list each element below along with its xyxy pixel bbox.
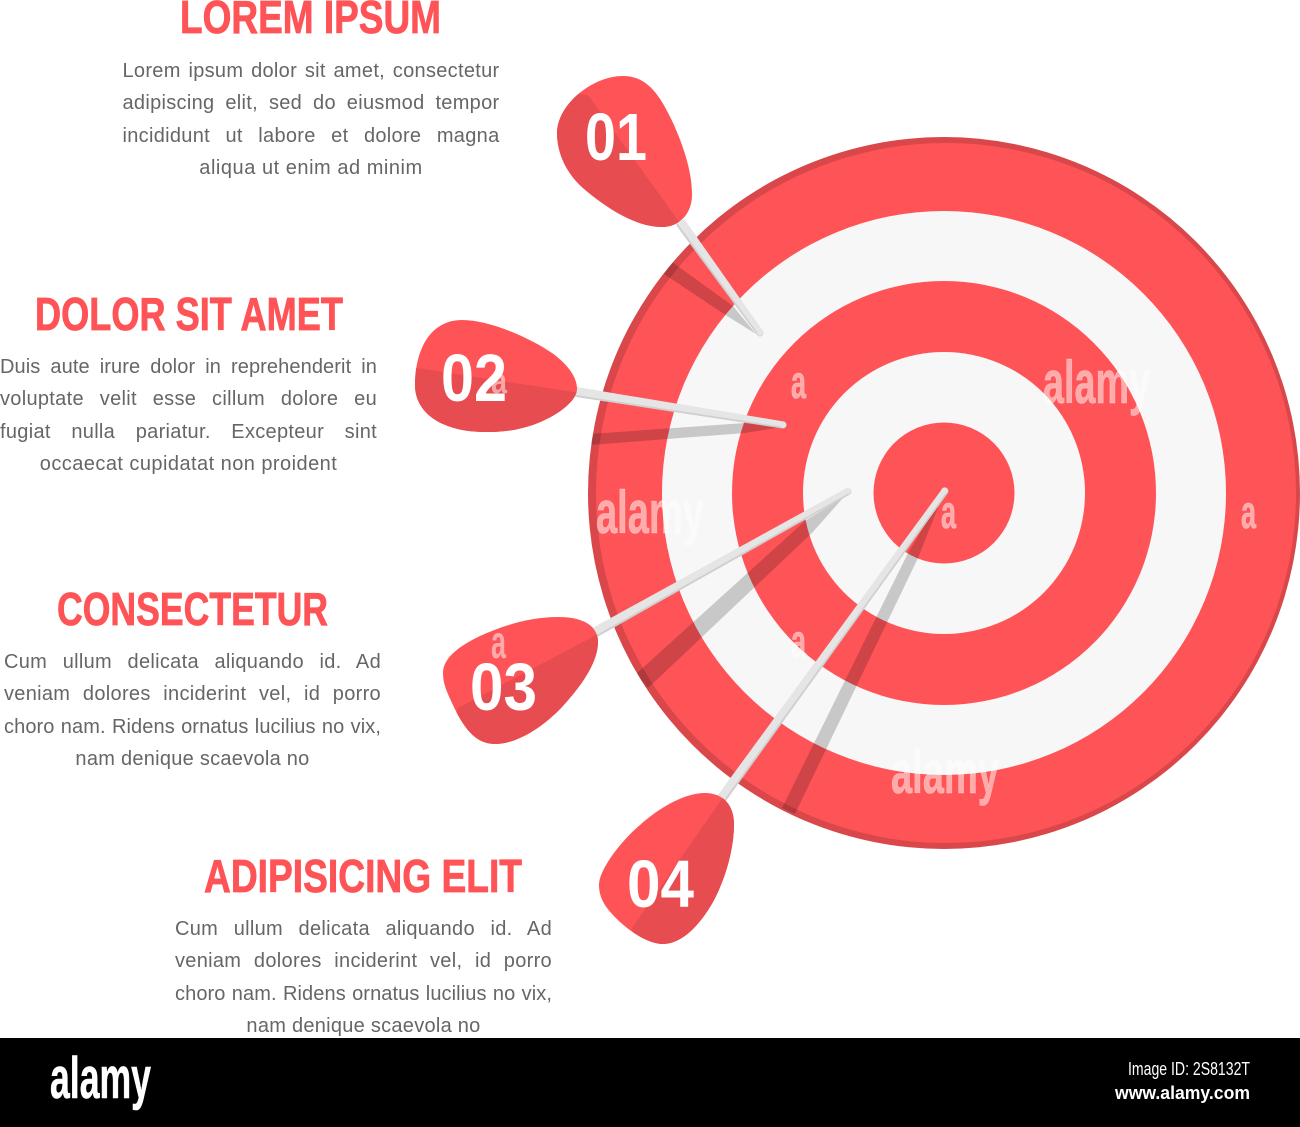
dart 04 — [599, 487, 948, 960]
text block: Lorem ipsum: adipiscing elit, sed do eiusmod tempor — [122, 92, 500, 114]
text block: Consectetur: veniam dolores inciderint vel, id porro — [4, 683, 381, 705]
text block: Adipisicing elit: choro nam. Ridens ornatus lucilius no vix, — [175, 983, 552, 1005]
text block: Dolor sit amet: voluptate velit esse cillum dolore eu — [0, 388, 377, 410]
dart 02: a — [491, 360, 508, 401]
text block: Consectetur: nam denique scaevola no — [75, 748, 310, 770]
watermarks on board: a — [1241, 486, 1256, 538]
text block: Lorem ipsum — [122, 60, 500, 179]
dart 02 — [405, 320, 786, 440]
text block: Lorem ipsum: Lorem ipsum dolor sit amet, consectetur — [122, 60, 500, 82]
text block: Consectetur: Cum ullum delicata aliquando id. Ad — [4, 651, 381, 673]
watermarks on board: alamy — [891, 739, 999, 806]
dart 04: 04 — [627, 847, 694, 922]
heading: Consectetur: CONSECTETUR — [57, 583, 328, 635]
text block: Adipisicing elit: nam denique scaevola no — [246, 1015, 481, 1037]
watermarks on board: a — [941, 486, 956, 538]
watermarks on board — [596, 349, 1256, 806]
text block: Adipisicing elit — [175, 918, 552, 1037]
dart 03: a — [491, 616, 506, 668]
text block: Lorem ipsum: aliqua ut enim ad minim — [199, 157, 423, 179]
dart 03 — [440, 488, 852, 760]
dart 03: 03 — [470, 650, 537, 725]
text block: Consectetur: choro nam. Ridens ornatus lucilius no vix, — [4, 716, 381, 738]
text block: Lorem ipsum: incididunt ut labore et dolore magna — [122, 125, 500, 147]
watermarks on board: alamy — [1043, 349, 1150, 416]
dart 02: 02 — [441, 341, 507, 416]
dart 01: 01 — [585, 100, 647, 175]
text block: Dolor sit amet: fugiat nulla pariatur. Excepteur sint — [0, 421, 377, 443]
text block: Adipisicing elit: Cum ullum delicata aliquando id. Ad — [175, 918, 552, 940]
watermarks on board: alamy — [596, 479, 704, 546]
dart shadows — [590, 262, 943, 814]
watermarks on board: a — [791, 615, 806, 667]
dart 01 — [540, 76, 764, 336]
footer image id: Image ID: 2S8132T — [1128, 1059, 1250, 1079]
footer bar — [0, 1038, 1300, 1127]
text block: Dolor sit amet: Duis aute irure dolor in reprehenderit in — [0, 356, 377, 378]
heading: Adipisicing elit: ADIPISICING ELIT — [204, 850, 522, 902]
watermarks on board: a — [791, 356, 806, 408]
text block: Consectetur — [4, 651, 381, 770]
text block: Adipisicing elit: veniam dolores inciderint vel, id porro — [175, 950, 552, 972]
footer url: www.alamy.com — [1114, 1083, 1250, 1103]
footer logo: alamy — [50, 1046, 151, 1111]
heading: Dolor sit amet: DOLOR SIT AMET — [35, 288, 343, 340]
target board — [588, 137, 1300, 849]
text block: Dolor sit amet: occaecat cupidatat non proident — [40, 453, 337, 475]
text block: Dolor sit amet — [0, 356, 377, 475]
